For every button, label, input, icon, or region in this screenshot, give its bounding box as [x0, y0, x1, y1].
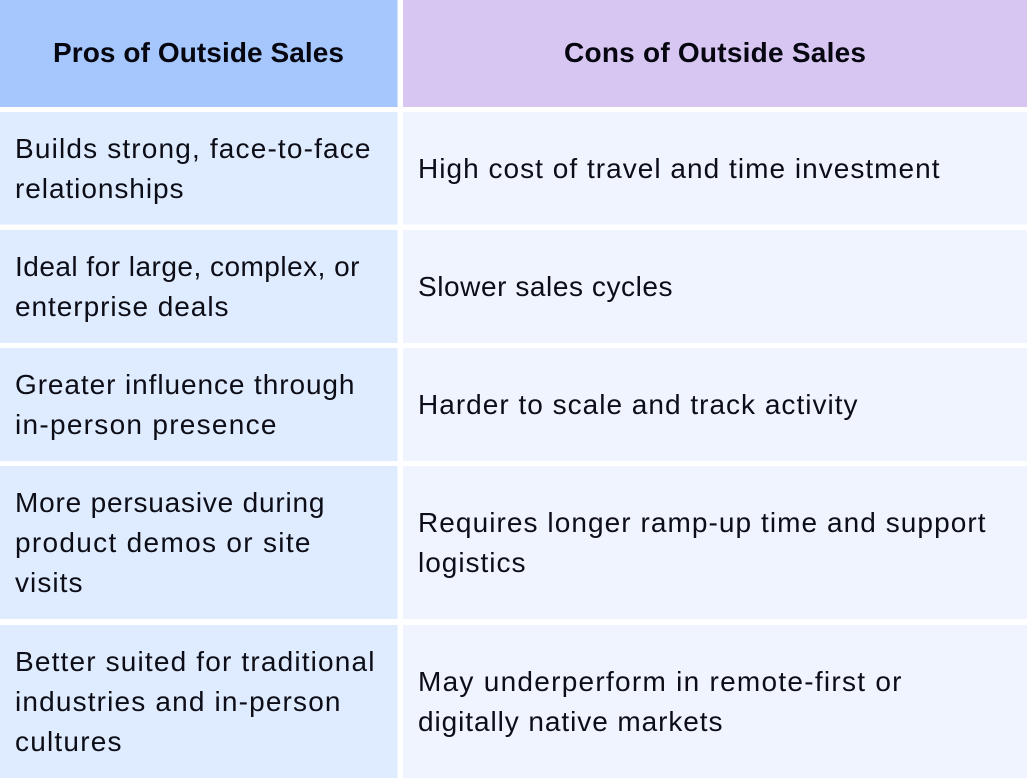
pro row 5: traditional industries: Better suited for traditional — [15, 646, 374, 677]
con row 5: remote-first markets: digitally native markets — [418, 706, 722, 737]
pro row 2: enterprise deals: enterprise deals — [15, 291, 228, 322]
pro row 4: persuasive demos: visits — [15, 567, 82, 598]
pro row 2: enterprise deals: Ideal for large, complex, or — [15, 251, 360, 282]
con row 1: travel cost: High cost of travel and time investment — [418, 153, 940, 184]
con row 1: travel cost — [403, 112, 1027, 224]
pro row 5: traditional industries: industries and in-person — [15, 686, 340, 717]
pro row 3: in-person influence — [0, 348, 398, 461]
pro row 4: persuasive demos — [0, 466, 398, 619]
pro row 3: in-person influence: Greater influence through — [15, 369, 354, 400]
con row 4: ramp-up time — [403, 466, 1027, 619]
pro row 5: traditional industries — [0, 625, 398, 778]
con row 4: ramp-up time: Requires longer ramp-up time and support — [418, 507, 986, 538]
header: cons of outside sales: Cons of Outside Sales — [564, 37, 866, 68]
pro row 3: in-person influence: in-person presence — [15, 409, 276, 440]
pro row 4: persuasive demos: product demos or site — [15, 527, 310, 558]
pro row 2: enterprise deals — [0, 230, 398, 343]
con row 3: harder to scale — [403, 348, 1027, 461]
pro row 1: face-to-face relationships: Builds strong, face-to-face — [15, 133, 370, 164]
header: pros of outside sales: Pros of Outside Sales — [53, 37, 344, 68]
header: cons of outside sales — [403, 0, 1027, 107]
pro row 5: traditional industries: cultures — [15, 726, 122, 757]
con row 4: ramp-up time: logistics — [418, 547, 526, 578]
con row 5: remote-first markets — [403, 625, 1027, 778]
pro row 1: face-to-face relationships — [0, 112, 398, 224]
con row 2: slower cycles: Slower sales cycles — [418, 271, 672, 302]
header: pros of outside sales — [0, 0, 398, 107]
con row 2: slower cycles — [403, 230, 1027, 343]
pro row 1: face-to-face relationships: relationships — [15, 173, 184, 204]
con row 3: harder to scale: Harder to scale and track activity — [418, 389, 858, 420]
con row 5: remote-first markets: May underperform in remote-first or — [418, 666, 902, 697]
pro row 4: persuasive demos: More persuasive during — [15, 487, 324, 518]
